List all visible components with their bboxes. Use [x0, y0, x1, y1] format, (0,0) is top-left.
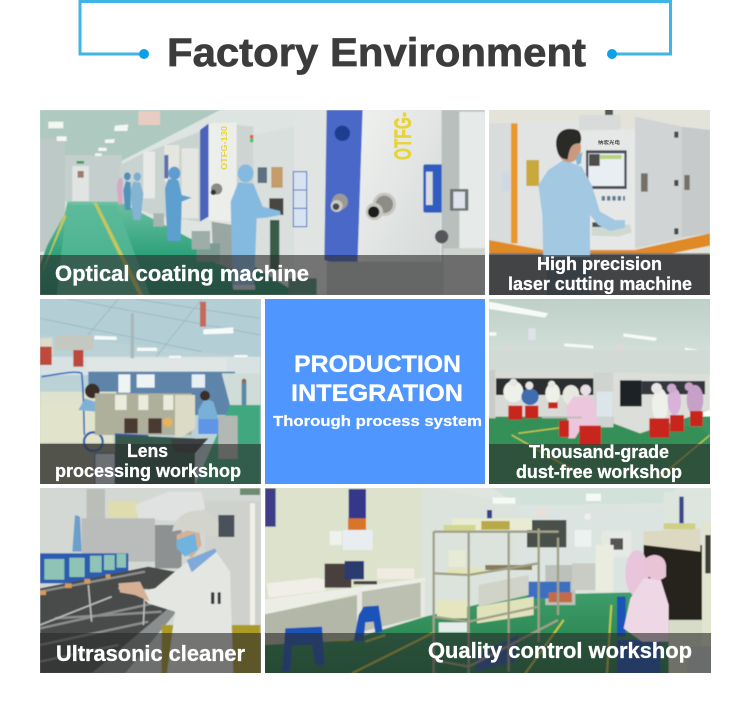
heading: production: PRODUCTION — [294, 351, 461, 378]
caption: ultrasonic cleaner: Ultrasonic cleaner — [56, 641, 245, 666]
caption: dust-free workshop: dust-free workshop — [516, 462, 682, 482]
photo: coating machine corridor — [37, 107, 490, 300]
caption band — [40, 255, 485, 295]
bracket frame — [80, 2, 670, 54]
header: title with bracket frame — [80, 2, 670, 75]
heading: integration: INTEGRATION — [291, 380, 463, 407]
machine brand label: 纳宏光电 — [598, 139, 621, 146]
blue background — [265, 299, 485, 484]
caption: high precision: High precision — [537, 254, 662, 274]
panel: production integration — [265, 299, 485, 484]
caption band — [40, 444, 261, 484]
panel: lens processing workshop — [35, 295, 265, 488]
panel: quality control workshop — [262, 485, 715, 678]
machine label: large door: OTFG- — [390, 112, 417, 160]
photo: operator at laser cutter — [485, 107, 715, 298]
panel: optical coating machine — [37, 107, 490, 300]
photo: quality control room — [262, 485, 715, 678]
panel: thousand-grade dust-free workshop — [485, 295, 715, 488]
photo: lens workshop — [35, 295, 265, 488]
caption band — [489, 444, 710, 484]
photo: dust-free workshop — [485, 295, 715, 488]
title: Factory Environment — [167, 31, 586, 75]
caption: quality control workshop: Quality control workshop — [428, 638, 692, 663]
caption: optical coating machine: Optical coating machine — [55, 261, 309, 286]
panel: high precision laser cutting machine — [485, 107, 715, 298]
caption: processing workshop: processing workshop — [55, 461, 241, 481]
caption band — [40, 633, 261, 673]
caption: lens: Lens — [127, 441, 168, 461]
subheading: Thorough process system — [273, 413, 482, 430]
machine label: small door: OTFG-130 — [220, 125, 229, 170]
photo: worker at ultrasonic cleaner — [35, 485, 265, 678]
caption: thousand-grade: Thousand-grade — [529, 442, 669, 462]
left dot — [139, 49, 149, 59]
right dot — [607, 49, 617, 59]
caption band — [489, 255, 710, 295]
caption: laser cutting machine: laser cutting machine — [508, 274, 692, 294]
panel: ultrasonic cleaner — [35, 485, 265, 678]
caption band — [265, 633, 711, 673]
